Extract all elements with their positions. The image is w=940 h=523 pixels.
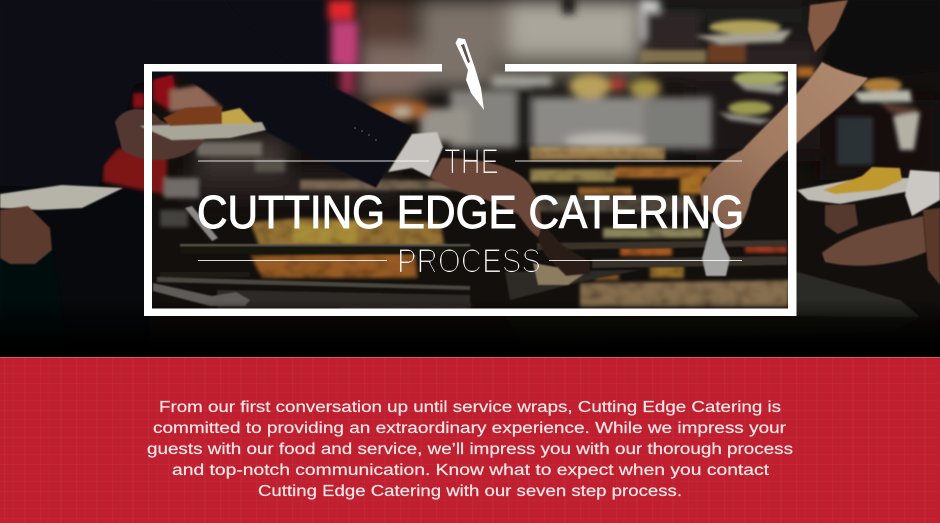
sleeve buttons [354,127,377,141]
intro paragraph: Cutting Edge Catering with our seven step process. [258,483,682,500]
serving tongs and spoons [153,206,250,306]
blurred guests behind the buffet [180,0,940,197]
hands at right [822,204,940,285]
blurred plates at top right [640,20,920,165]
white title frame [144,64,796,316]
heading: THE: THE [444,142,499,182]
intro paragraph: and top-notch communication. Know what to expect when you contact [172,462,770,479]
bright red and pink clothing [328,0,700,94]
right plate with food [797,167,940,216]
dark figure at top centre [215,0,328,85]
icon: chef knife [456,38,484,110]
intro paragraph: committed to providing an extraordinary experience. While we impress your [153,420,786,437]
white shirt cuff [388,132,443,177]
intro paragraph: guests with our food and service, we’ll impress you with our thorough process [147,441,793,458]
server's black sleeve and left figure [0,0,411,357]
silver serving spoon [702,222,730,276]
panel: buffet photo background [0,0,940,357]
plate at far left [0,185,123,210]
left figure hand [0,206,52,264]
right black sleeve [822,0,940,78]
blurred plate stacks and trays [366,74,712,149]
heading: Cutting Edge Catering: CUTTING EDGE CATERING [197,186,744,238]
left blurred red jacket and whites [103,72,285,227]
panel: red intro band [0,357,940,523]
server hand [430,158,541,237]
server forearm and right hand [700,62,868,238]
intro paragraph [147,399,793,500]
wooden serving scoop [527,212,590,285]
bottom vignette [0,300,940,348]
food rows on buffet [250,147,866,308]
chafing trays [157,240,920,340]
intro paragraph: From our first conversation up until service wraps, Cutting Edge Catering is [159,399,781,416]
heading: PROCESS: PROCESS [397,242,541,280]
upper fingers [808,0,848,52]
decorative rules around title [198,160,742,261]
left plate with food [115,106,266,160]
